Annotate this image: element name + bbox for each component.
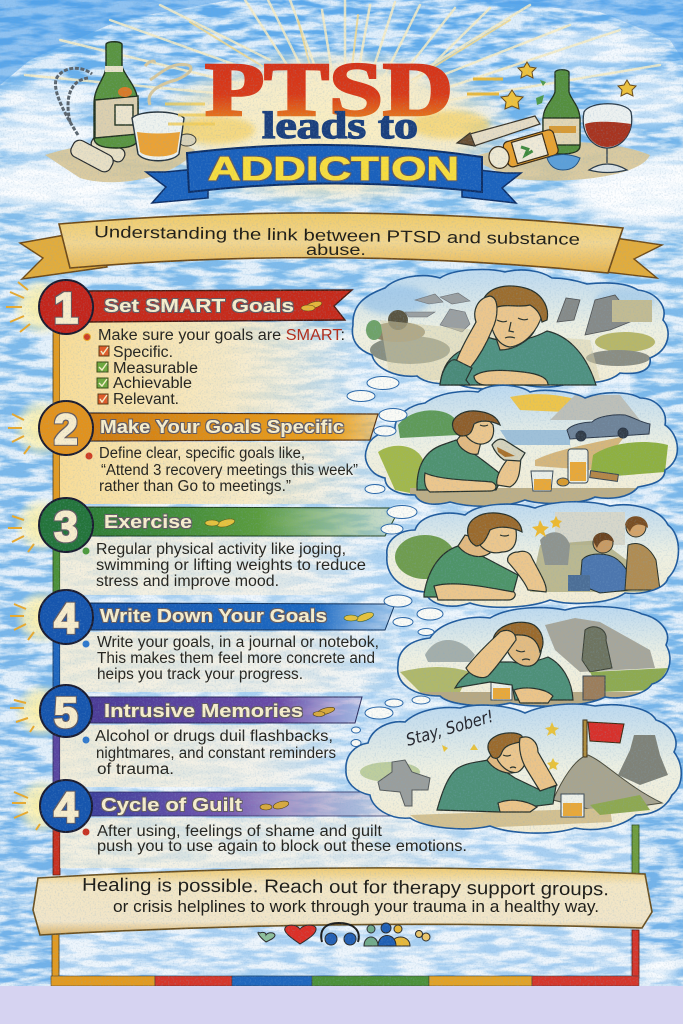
heading 3: Exercise: [104, 511, 192, 532]
text block 4: [82, 634, 379, 683]
icon: headphones: [321, 923, 359, 945]
number badge 5: 5: [54, 689, 78, 737]
right table and props: [457, 62, 650, 181]
thought cloud 3: [387, 502, 678, 607]
background scene 2: [378, 394, 668, 510]
background scene 4: [400, 618, 668, 708]
section 2: Make Your Goals Specific: [8, 398, 378, 495]
closing text: or crisis helplines to work through your trauma in a healthy way.: [113, 897, 599, 916]
icon: whiskey glass 5: [561, 794, 584, 817]
thought cloud 5: [346, 704, 681, 833]
icon: sparks: [467, 79, 503, 94]
subtitle text: [94, 223, 580, 259]
icon: dog tags: [68, 134, 127, 174]
text block 2: rather than Go to meetings.”: [99, 478, 291, 495]
number badge 4: 4: [54, 595, 78, 643]
icon: pill bowl: [547, 154, 580, 170]
thought bubbles lower: [351, 595, 443, 746]
figure: man 5: [437, 733, 557, 812]
rim 4: [398, 607, 670, 706]
icon: dog tag chain: [55, 68, 92, 135]
icon: leaf 4: [344, 611, 375, 623]
bottom colour bar: [51, 976, 639, 986]
number burst 3: [8, 497, 70, 553]
thought bubbles upper: [347, 376, 399, 402]
section backdrops: [60, 322, 480, 868]
section 3: Exercise: [8, 497, 400, 590]
rim 3: [387, 502, 678, 607]
cloud shape 4: [398, 607, 670, 706]
number badge 6: [40, 780, 92, 832]
checklist: [97, 344, 198, 408]
icon: right bottle: [543, 70, 580, 154]
text block 2: [86, 445, 358, 495]
rim 2: [366, 385, 677, 506]
figure: man 2: [417, 411, 525, 492]
figure: man 4: [455, 622, 573, 703]
text block 3: Regular physical activity like joging,: [96, 541, 346, 558]
number badge 6: 4: [54, 784, 78, 832]
banner 3: [85, 507, 400, 536]
banner 2: [85, 413, 378, 441]
rim 1: [352, 270, 668, 389]
text block 1: [84, 327, 345, 408]
heading 5: Intrusive Memories: [104, 700, 303, 721]
section 4: Write Down Your Goals: [10, 589, 395, 683]
icon: car: [567, 415, 650, 441]
text block 4: heips you track your progress.: [97, 666, 303, 683]
checklist: Specific.: [113, 344, 173, 361]
icon: people: [364, 923, 410, 946]
icon: leaf 5: [313, 706, 335, 716]
number burst 5: [10, 683, 70, 739]
checklist: Relevant.: [113, 391, 179, 408]
icon: whiskey glass: [132, 112, 184, 161]
support icons: [258, 923, 430, 946]
thought cloud 4: [398, 607, 670, 708]
number badge 1: 1: [54, 284, 78, 333]
icon: leaf 3: [205, 517, 236, 529]
text block 6: After using, feelings of shame and guilt: [97, 823, 383, 840]
text block 4: Write your goals, in a journal or notebok,: [97, 634, 379, 651]
icon: leaf 6: [260, 800, 290, 810]
text block 5: of trauma.: [97, 761, 174, 778]
title banner: [146, 145, 521, 203]
text block 3: swimming or lifting weights to reduce: [96, 557, 366, 574]
title: leads to: leads to: [262, 105, 418, 147]
thought cloud 1: [352, 270, 668, 389]
text block 6: [82, 823, 467, 855]
cloud shape 2: [366, 385, 677, 506]
text block 5: nightmares, and constant reminders: [96, 745, 336, 762]
number burst 4: [10, 589, 70, 645]
section 1: Set SMART Goals: [6, 277, 352, 408]
heading 4: Write Down Your Goals: [100, 605, 327, 626]
sun rays: [25, 0, 660, 100]
banner 5: [85, 697, 362, 723]
thought cloud 2: [366, 385, 677, 510]
left table and props: [45, 42, 215, 182]
figure: man 3: [424, 513, 546, 600]
subtitle ribbon: [20, 213, 662, 279]
background scene 3: [395, 512, 660, 593]
subtitle text: Understanding the link between PTSD and substance: [94, 223, 580, 249]
number burst 2: [8, 398, 72, 458]
number burst 6: [12, 778, 70, 834]
heading 1: Set SMART Goals: [104, 295, 294, 316]
title glow: [145, 48, 515, 208]
icon: stars: [501, 62, 636, 109]
closing text: Healing is possible. Reach out for therapy support groups.: [82, 874, 609, 899]
icon: leaf 1: [301, 300, 323, 311]
text: Stay, Sober: Stay, Sober!: [404, 707, 496, 751]
icon: warm strokes: [165, 104, 215, 124]
icon: red flag: [583, 720, 624, 757]
number badge 5: [40, 685, 92, 737]
background scene 5: [360, 720, 668, 830]
background scene 1: [360, 285, 655, 380]
content frame: [51, 325, 639, 986]
section 5: Intrusive Memories: [10, 683, 362, 778]
text block 2: “Attend 3 recovery meetings this week”: [101, 462, 358, 479]
subtitle text: abuse.: [306, 242, 366, 259]
cloud shape 5: [346, 704, 681, 833]
number badge 2: [39, 401, 93, 455]
icon: big heart: [285, 925, 316, 944]
icon: green bottle: [94, 42, 138, 148]
icon: whiskey glass 4: [491, 676, 605, 700]
text block 5: Alcohol or drugs duil flashbacks,: [95, 728, 333, 745]
text block 5: [82, 728, 336, 778]
checklist: Achievable: [113, 375, 192, 392]
lower page band: [0, 986, 683, 1024]
closing text: [82, 874, 609, 916]
icon: small stars: [442, 722, 559, 770]
icon: clasped hands: [416, 930, 430, 941]
text block 3: stress and improve mood.: [96, 573, 279, 590]
text block 3: [82, 541, 366, 590]
cloud shape 3: [387, 502, 678, 607]
number badge 3: 3: [54, 503, 78, 551]
icon: rolled joint: [457, 116, 540, 146]
title: ADDICTION: ADDICTION: [208, 150, 459, 187]
closing scroll: [33, 868, 652, 935]
text block 4: This makes them feel more concrete and: [97, 650, 375, 667]
text block 1: Make sure your goals are SMART:: [98, 327, 345, 344]
number badge 1: [39, 280, 93, 334]
cloud shape 1: [352, 270, 668, 389]
number badge 4: [39, 590, 93, 644]
thought bubbles middle: [365, 408, 417, 540]
banner 6: [85, 792, 395, 816]
checklist: Measurable: [113, 360, 198, 377]
number badge 3: [39, 498, 93, 552]
banner 1: [85, 290, 352, 322]
icon: wine glass: [583, 104, 632, 172]
text block 2: Define clear, specific goals like,: [99, 445, 305, 462]
icon: leaf flecks: [536, 80, 546, 105]
banner 4: [85, 603, 395, 630]
heading 2: Make Your Goals Specific: [100, 416, 344, 437]
number burst 1: [6, 277, 72, 337]
icon: small heart: [258, 932, 275, 942]
title: PTSD: PTSD: [205, 48, 453, 132]
section 6: Cycle of Guilt: [12, 778, 467, 855]
text block 6: push you to use again to block out these emotions.: [97, 838, 467, 855]
rim 5: [346, 704, 681, 833]
icon: pill bottle: [486, 129, 559, 173]
icon: glass table: [531, 449, 618, 491]
number badge 2: 2: [54, 406, 78, 454]
figure: man 1: [440, 286, 596, 385]
heading 6: Cycle of Guilt: [101, 794, 242, 815]
icon: smoke: [145, 61, 191, 105]
